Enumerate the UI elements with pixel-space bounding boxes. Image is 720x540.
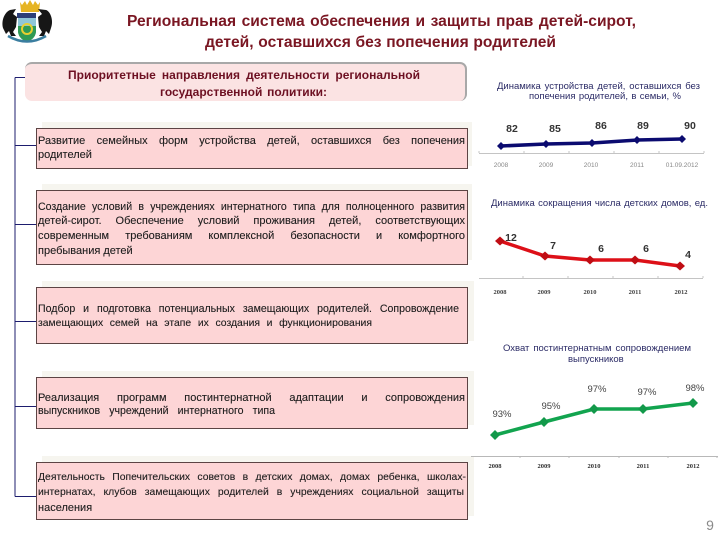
panel: post-residential adaptation: Реализация программ постинтернатной адаптации и сопровождения — [38, 392, 465, 404]
panel: post-residential adaptation — [36, 377, 468, 429]
panel: guardianship councils — [36, 462, 468, 520]
title: детей, оставшихся без попечения родителей — [205, 34, 556, 51]
line chart: post-residential coverage: 2010 — [588, 463, 600, 470]
panel: priority directions heading — [25, 62, 467, 101]
line chart: family placement: 2010 — [584, 162, 599, 169]
line chart: orphanage reduction — [479, 232, 704, 296]
line chart: post-residential coverage: 2011 — [637, 463, 649, 470]
line chart: family placement: 2008 — [494, 162, 509, 169]
line chart: post-residential coverage: 93% — [492, 409, 512, 420]
line chart: post-residential coverage: 2008 — [488, 463, 502, 470]
panel: residential conditions: детей-сирот. Обеспечение условий проживания детей, соответствующих — [38, 215, 465, 227]
panel: residential conditions: пребывания детей — [38, 245, 133, 257]
line chart: orphanage reduction: 7 — [550, 240, 556, 252]
line chart: family placement: 2009 — [539, 162, 554, 169]
panel: residential conditions: современным требованиям комплексной безопасности и комфортного — [38, 230, 465, 242]
line chart: family placement: 2011 — [630, 162, 644, 169]
line chart: post-residential coverage: 98% — [685, 383, 705, 394]
panel: guardianship councils: Деятельность Попечительских советов в детских домах, домах ребенка, школах- — [38, 472, 466, 483]
chart title: orphanage reduction: Динамика сокращения числа детских домов, ед. — [491, 198, 708, 209]
chart title: family placement dynamics — [497, 81, 700, 102]
line chart: family placement: 85 — [549, 123, 561, 135]
panel: post-residential adaptation: выпускников учреждений интернатного типа — [38, 405, 275, 417]
icon: regional coat of arms — [2, 0, 52, 43]
line chart: orphanage reduction: 2010 — [584, 289, 596, 296]
line chart: orphanage reduction: 12 — [505, 232, 517, 244]
line chart: post-residential coverage: 95% — [541, 401, 561, 412]
panel: priority directions heading: Приоритетные направления деятельности региональной — [68, 68, 420, 82]
line chart: family placement: 01.09.2012 — [666, 162, 699, 169]
panel: family placement: родителей — [38, 149, 92, 161]
line chart: post-residential coverage: 97% — [587, 384, 607, 395]
page number: 9 — [706, 517, 714, 533]
panel: substitute parents: Подбор и подготовка потенциальных замещающих родителей. Сопровождение — [38, 303, 459, 315]
panel: residential conditions — [36, 190, 468, 265]
line chart: orphanage reduction: 2011 — [629, 289, 641, 296]
line chart: orphanage reduction: 2008 — [494, 289, 507, 296]
line chart: orphanage reduction: 6 — [643, 243, 649, 255]
line chart: post-residential coverage: 2009 — [538, 463, 551, 470]
chart title: post-residential coverage — [503, 343, 691, 365]
chart title: post-residential coverage: выпускников — [568, 354, 624, 365]
line chart: post-residential coverage: 2012 — [686, 463, 700, 470]
line chart: family placement — [478, 120, 704, 169]
panel: guardianship councils: населения — [38, 502, 92, 514]
panel: guardianship councils: интернатах, клубов замещающих родителей в учреждениях социальной защиты — [38, 487, 464, 498]
panel: substitute parents — [36, 287, 468, 344]
title — [127, 13, 636, 51]
title: Региональная система обеспечения и защиты прав детей-сирот, — [127, 13, 636, 30]
line chart: family placement: 90 — [684, 120, 696, 132]
line chart: family placement: 89 — [637, 120, 649, 132]
line chart: post-residential coverage: 97% — [637, 387, 657, 398]
line chart: orphanage reduction: 6 — [598, 243, 604, 255]
line chart: family placement: 82 — [506, 123, 518, 135]
line chart: orphanage reduction: 2012 — [674, 289, 688, 296]
chart title: post-residential coverage: Охват постинтернатным сопровождением — [503, 343, 691, 354]
line chart: family placement: 86 — [595, 120, 607, 132]
panel: family placement: Развитие семейных форм устройства детей, оставшихся без попечения — [38, 135, 465, 147]
line chart: orphanage reduction: 4 — [685, 249, 691, 261]
chart title: family placement dynamics: Динамика устройства детей, оставшихся без — [497, 81, 700, 92]
chart title: family placement dynamics: попечения родителей, в семьи, % — [529, 91, 681, 102]
panel: family placement — [36, 128, 468, 169]
line chart: orphanage reduction: 2009 — [538, 289, 551, 296]
panel: substitute parents: замещающих семей на этапе их создания и функционирования — [38, 318, 372, 329]
panel: residential conditions: Создание условий в учреждениях интернатного типа для полноценного развития — [38, 201, 465, 213]
bracket connector — [14, 77, 36, 497]
panel: priority directions heading: государственной политики: — [160, 85, 327, 99]
